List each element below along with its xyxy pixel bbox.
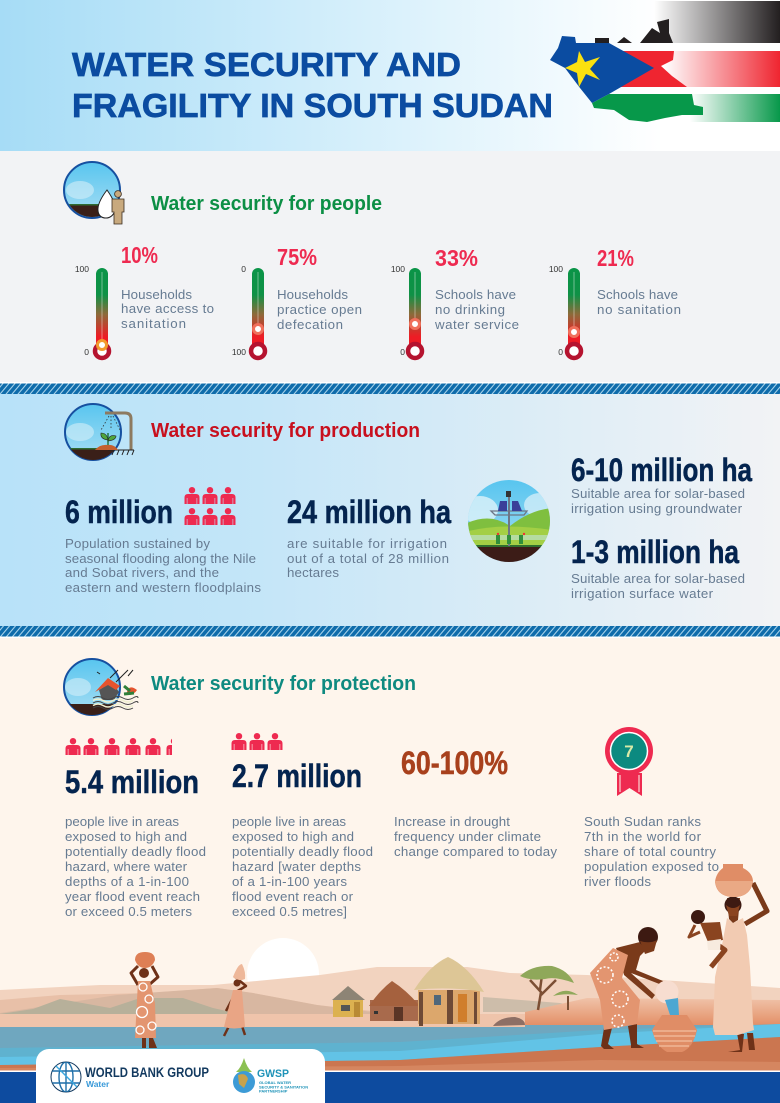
thermometer: 33%: 0 <box>400 347 405 357</box>
stat: 6 million: seasonal flooding along the Nile <box>65 551 256 566</box>
thermometer: 21% <box>549 264 581 358</box>
stat: 75%: Households <box>277 287 348 302</box>
thermometer: 10%: 100 <box>75 264 89 274</box>
stat: rank text: population exposed to <box>584 859 719 874</box>
panel: header <box>0 0 780 151</box>
illustration: river landscape <box>0 864 780 1071</box>
rock <box>493 1017 525 1026</box>
heading: Water security for production <box>151 420 420 442</box>
stat: rank text: share of total country <box>584 844 716 859</box>
icon: solar irrigation circle <box>468 480 550 562</box>
logo: GWSP: SECURITY & SANITATION <box>259 1084 308 1090</box>
icon: people group <box>184 487 236 525</box>
stat: 6-10 million ha <box>571 452 752 516</box>
stat: 5.4 million: 5.4 million <box>65 764 199 800</box>
stat: 10%: have access to <box>121 301 214 316</box>
stat: 6-10 million ha: irrigation using groundwater <box>571 501 743 516</box>
stat: rank text: 7th in the world for <box>584 829 702 844</box>
stat: 75%: practice open <box>277 302 362 317</box>
thermometer: 21%: 0 <box>558 347 563 357</box>
hut small <box>332 986 365 1017</box>
icon: people <box>60 162 124 224</box>
heading: Water security for people <box>151 193 382 215</box>
stat: 5.4 million: potentially deadly flood <box>65 844 206 859</box>
woman with pot 2 <box>224 964 246 1036</box>
stat: 33%: water service <box>434 317 519 332</box>
stat: 6 million: Population sustained by <box>65 536 210 551</box>
thermometer: 33% <box>391 264 422 358</box>
stat: 33% <box>434 245 519 332</box>
stat: 5.4 million: year flood event reach <box>65 889 200 904</box>
stat: 10% <box>121 242 214 331</box>
stat: 2.7 million: flood event reach or <box>232 889 354 904</box>
stat: 2.7 million: potentially deadly flood <box>232 844 373 859</box>
stat: 75%: defecation <box>277 317 343 332</box>
stat: 60-100%: frequency under climate <box>394 829 541 844</box>
logo: GWSP: GLOBAL WATER <box>259 1080 291 1085</box>
stat: 24 million ha <box>287 494 451 580</box>
logo: GWSP: GWSP <box>257 1068 289 1080</box>
stat: 2.7 million: exceed 0.5 metres] <box>232 904 347 919</box>
stat: 6-10 million ha: Suitable area for solar-based <box>571 486 745 501</box>
title: WATER SECURITY AND <box>72 47 461 84</box>
thermometer: 10% <box>75 264 109 358</box>
thermometer: 75%: 100 <box>232 347 246 357</box>
stat: 24 million ha: 24 million ha <box>287 494 451 530</box>
stat: 33%: 33% <box>435 245 478 271</box>
stat: 10%: 10% <box>121 242 158 268</box>
stat: 1-3 million ha: irrigation surface water <box>571 586 714 601</box>
stat: 6 million: 6 million <box>65 494 173 530</box>
stat: 2.7 million: hazard [water depths <box>232 859 361 874</box>
hut large <box>414 957 484 1026</box>
stat: 5.4 million <box>65 738 206 919</box>
stat: 6 million <box>65 487 261 595</box>
icon: rank medal: 7 <box>624 742 634 761</box>
icon: flood <box>60 659 138 718</box>
stat: 2.7 million: exposed to high and <box>232 829 354 844</box>
stat: 60-100%: 60-100% <box>401 745 508 781</box>
panel: water security for protection <box>0 638 780 990</box>
icon: South Sudan flag map <box>550 1 780 122</box>
stat: 5.4 million: people live in areas <box>65 814 179 829</box>
stat: 33%: Schools have <box>435 287 516 302</box>
logo: GWSP: PARTNERSHIP <box>259 1088 288 1094</box>
title: FRAGILITY IN SOUTH SUDAN <box>72 88 553 125</box>
stat: 75% <box>277 244 362 332</box>
logo: World Bank Group: Water <box>86 1079 110 1089</box>
icon: people row <box>232 733 282 750</box>
stat: 2.7 million: people live in areas <box>232 814 346 829</box>
icon: people row <box>66 738 182 755</box>
logo: World Bank Group <box>51 1062 209 1092</box>
stat: rank text: South Sudan ranks <box>584 814 701 829</box>
thermometer: 33%: 100 <box>391 264 405 274</box>
stat: 24 million ha: out of a total of 28 million <box>287 551 449 566</box>
stat: 21%: no sanitation <box>597 302 681 317</box>
stat: 6 million: and Sobat rivers, and the <box>65 565 219 580</box>
stat: 21%: 21% <box>597 245 634 271</box>
stat: 60-100% <box>394 745 557 859</box>
tree <box>520 966 578 1010</box>
panel: logos <box>36 1049 325 1103</box>
stat: 75%: 75% <box>277 244 317 270</box>
logo: World Bank Group: WORLD BANK GROUP <box>85 1065 209 1080</box>
stat: 10%: sanitation <box>121 316 186 331</box>
thermometer: 75%: 0 <box>241 264 246 274</box>
thermometer: 21%: 100 <box>549 264 563 274</box>
hut round <box>369 981 418 1021</box>
stat: 21% <box>597 245 681 317</box>
stat: 1-3 million ha: Suitable area for solar-based <box>571 571 745 586</box>
stat: 1-3 million ha: 1-3 million ha <box>571 534 739 570</box>
stat: 60-100%: change compared to today <box>394 844 557 859</box>
stat: 5.4 million: depths of a 1-in-100 <box>65 874 189 889</box>
stat: 5.4 million: exposed to high and <box>65 829 187 844</box>
thermometer: 10%: 0 <box>84 347 89 357</box>
woman with pot 1 <box>131 952 158 1048</box>
stat: 2.7 million: 2.7 million <box>232 758 362 794</box>
stat: 24 million ha: hectares <box>287 565 339 580</box>
stat: 5.4 million: hazard, where water <box>65 859 188 874</box>
stat: rank text: river floods <box>584 874 651 889</box>
jars <box>652 980 697 1052</box>
panel: water security for people <box>0 151 780 383</box>
panel: water security for production <box>0 394 780 626</box>
stat: 5.4 million: or exceed 0.5 meters <box>65 904 192 919</box>
icon: irrigation <box>60 404 134 463</box>
stat: 33%: no drinking <box>435 302 505 317</box>
woman standing with child <box>689 864 767 1052</box>
icon: rank medal <box>605 727 653 796</box>
thermometer: 75% <box>232 264 265 358</box>
stat: 2.7 million <box>232 733 373 919</box>
stat: 21%: Schools have <box>597 287 678 302</box>
footer bar <box>0 1070 780 1103</box>
stat: 60-100%: Increase in drought <box>394 814 510 829</box>
stat: 24 million ha: are suitable for irrigation <box>287 536 447 551</box>
title <box>72 47 553 125</box>
logo: GWSP <box>233 1058 308 1094</box>
stat: 1-3 million ha <box>571 534 745 601</box>
woman crouching with jar <box>590 927 663 1049</box>
stat: 6 million: eastern and western floodplains <box>65 580 261 595</box>
stat: 2.7 million: of a 1-in-100 years <box>232 874 347 889</box>
stat: rank text <box>584 814 719 889</box>
stat: 10%: Households <box>121 287 192 302</box>
heading: Water security for protection <box>151 673 416 695</box>
